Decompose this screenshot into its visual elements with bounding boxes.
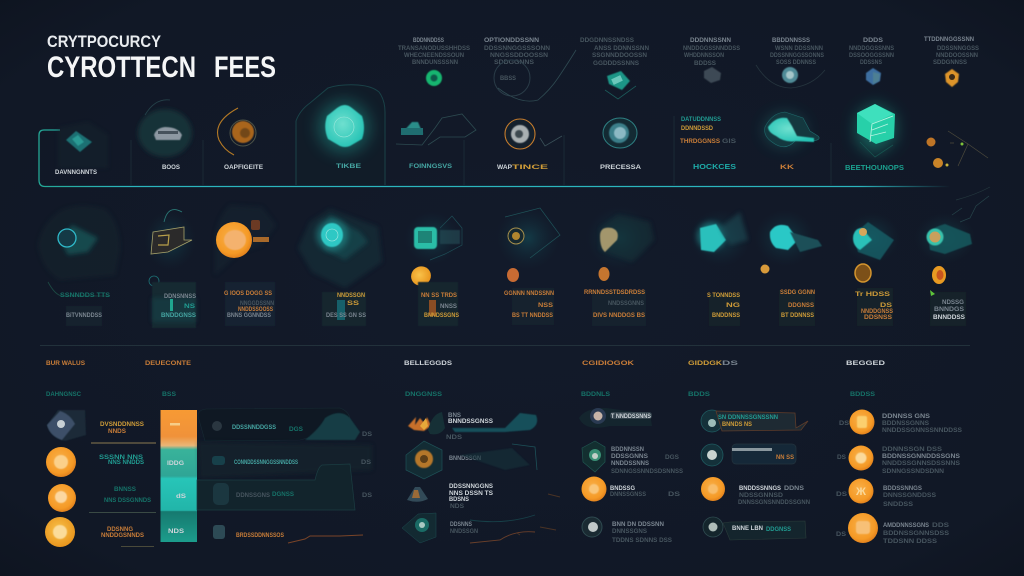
coin row 3 — [836, 478, 936, 508]
top text blocks and icons — [398, 37, 979, 101]
top item 4: NNDDGGSSNNDDSS — [683, 46, 740, 52]
bottom section headings: BDDS — [688, 392, 710, 398]
card 8: NG — [726, 303, 741, 309]
step 8: text stack: GIS — [722, 139, 736, 145]
dark badge item — [582, 517, 672, 544]
bottom section headings: DEUECONTE — [145, 361, 191, 367]
step 9: teal pouch — [765, 112, 819, 171]
panel row 3: DS — [362, 493, 372, 499]
stacked colour bar: NDS — [168, 529, 184, 535]
coin row 1: DDNNSS GNS — [882, 414, 930, 420]
grey coin row: DVSNDDNNSS — [100, 422, 144, 428]
title: FEES — [214, 51, 276, 84]
bottom section headings: BELLEGGDS — [404, 361, 452, 367]
step 10: large green cube — [845, 103, 904, 172]
panel row 1: DS — [362, 432, 372, 438]
card 2 — [144, 210, 196, 328]
orange coin row 3: BNNSS — [114, 487, 136, 493]
section divider — [40, 345, 970, 346]
coin row 3: DNNSSGNDDSS — [883, 493, 936, 499]
panel row 4: BRDSSDDNNSSOS — [236, 533, 284, 539]
top item 6: NNDDGGSSNNS — [849, 46, 894, 52]
panel row 3 — [197, 464, 372, 510]
shield item: BDDNNSSN — [611, 447, 644, 453]
panel row 3: DGNSS — [272, 492, 294, 498]
step 6: ringed coin: WAP — [497, 165, 512, 171]
coin row 4: BDDNSSGNNSDSS — [883, 531, 949, 537]
flame item: BNNDSSGNSS — [448, 419, 493, 425]
column 6: orange coins and descriptions — [836, 410, 962, 545]
card 10 — [844, 212, 900, 326]
teal outlined panel: BNNE LBN — [732, 526, 763, 532]
card 7: DIVS NNDDGS BS — [593, 313, 645, 319]
step 5: wallet and line — [396, 114, 476, 170]
step 8: text stack: HOCKCES — [693, 162, 736, 171]
top item 7 — [924, 37, 979, 87]
coin row 3: Ж — [855, 486, 866, 498]
step 8: text stack — [680, 117, 736, 171]
middle row of fee cards — [38, 196, 989, 328]
top item 7: TTDDNNGGSSNN — [924, 37, 974, 43]
orange coin row 2 — [46, 447, 144, 477]
stacked colour bar: IDDG — [167, 461, 184, 467]
dark teal item — [402, 494, 560, 543]
step 2: dark device: BOOS — [162, 165, 180, 171]
top item 1: TRANSANODUSSHHDSS — [398, 46, 470, 52]
step 8: text stack: THRDGGNSS — [680, 139, 720, 145]
stacked colour bar — [160, 410, 197, 542]
dark badge item: TDDNS SDNNS DSS — [612, 538, 672, 544]
card 7: NNDSSGNNS — [608, 301, 644, 307]
dark badge item: DNNSSGNS — [612, 529, 647, 535]
top item 5 — [756, 38, 825, 88]
panel row 4 — [213, 525, 363, 543]
gold hex item: BNNDSSGN — [449, 456, 481, 462]
top item 2: DDSSNNGGSSSONN — [484, 46, 550, 52]
circle item one: T NNDDSSNNS — [611, 414, 651, 420]
top item 2: SDDGGNNS — [494, 60, 534, 66]
pyramid item: DDSSNNGGNS — [449, 484, 493, 490]
card 6: BS TT NNDDSS — [512, 313, 553, 319]
coin row 3: BDDSSNNGS — [883, 486, 922, 492]
top item 6: DSSOOGGSSNN — [849, 53, 894, 59]
step 1: diamond — [55, 122, 108, 176]
step 3: orange coin: OAPFIGEITE — [224, 165, 263, 171]
title: CYROTTECN — [47, 51, 196, 84]
orange coin row: BNDDSSNNGS — [739, 486, 781, 492]
card 1: SSNNDDS TTS — [60, 293, 110, 299]
top item 1: BDDNNDDSS — [413, 38, 444, 44]
pyramid item: NDS — [450, 504, 464, 510]
column 4: icons and descriptions — [579, 408, 683, 544]
shield item: DDSSGNNS — [611, 454, 648, 460]
gold coin row 4: NNDDGSNNDS — [101, 533, 144, 539]
coin row 3: DS — [836, 492, 847, 498]
step 4: large teal hexagon: TIKBE — [336, 164, 361, 170]
coin row 4 — [836, 513, 949, 545]
card 2: DDNSNNSS — [164, 294, 196, 300]
dark blue panel: NN SS — [776, 455, 794, 461]
panel row 2 — [198, 442, 372, 478]
orange coin item — [582, 476, 680, 502]
card 8 — [690, 210, 750, 326]
column 3: icons and descriptions — [402, 412, 560, 543]
bottom section headings: GIDDGK — [688, 361, 723, 367]
orange coin row 3 — [48, 484, 156, 513]
card 9 — [755, 210, 822, 326]
top item 7: NNDDOOSSNN — [936, 53, 978, 59]
top item 3: SSGNNDDOOSSN — [592, 53, 647, 59]
bottom section headings: BUR WALUS — [46, 361, 85, 367]
card 2: BNDDGNSS — [161, 313, 196, 319]
column 5: icons and panels — [701, 410, 810, 540]
bottom section headings: CGIDIOGOK — [582, 361, 635, 367]
card 9: DDGNSS — [788, 303, 814, 309]
step 7: blue ring: PRECESSA — [600, 165, 642, 171]
card 1: BiTVNNDDSS — [66, 313, 102, 319]
timeline rail — [39, 130, 950, 186]
orange coin item: DNNSSGNSS — [610, 492, 646, 498]
bottom section headings: BSS — [162, 392, 176, 398]
bottom section headings: BDDNLS — [581, 392, 610, 398]
step 4: large teal hexagon — [296, 85, 385, 185]
coin row 4: AMDDNNSSGNS — [883, 523, 929, 529]
top item 3: ANSS DDNNSSNN — [594, 46, 649, 52]
orange coin row: NDSSGNNSD — [739, 493, 784, 499]
bottom section headings: DAHNGNSC — [46, 392, 82, 398]
coin row 2: NNDDSSGNNSDSSNNS — [882, 461, 960, 467]
step 7: blue ring — [600, 118, 642, 171]
card 11: BNNDGS — [934, 307, 964, 313]
top item 2: NNGSSDDOOSSN — [490, 53, 548, 59]
coin row 3: SNDDSS — [883, 502, 913, 508]
card 4 — [298, 209, 382, 326]
card 5: NN SS TRDS — [421, 293, 457, 299]
coin row 1: BDDNSSGNNS — [882, 421, 929, 427]
step 3: orange coin — [218, 108, 263, 171]
timeline panel — [39, 85, 990, 200]
top item 3: DDGDNNSSNDSS — [580, 38, 634, 44]
grey coin row — [47, 410, 156, 444]
card 10: Tr HDSS — [855, 292, 890, 298]
card 6: NSS — [538, 303, 553, 309]
panel row 3: DDNSSGNS — [236, 493, 270, 499]
coin row 1: DS — [839, 421, 849, 427]
card 3: G IOOS DOGG SS — [224, 291, 272, 297]
pyramid item: NNS DSSN TS — [449, 491, 493, 497]
coin row 1: NNDDSSGNNSSNNDDSS — [882, 428, 962, 434]
grey coin row: NNDS — [108, 429, 126, 435]
teal outlined panel: DDGNSS — [766, 527, 791, 533]
orange coin row — [701, 477, 810, 506]
card 6: GGNNN NNDSSNN — [504, 291, 554, 297]
coin row 4: TDDSNN DDSS — [883, 539, 937, 545]
panel row 2: CONNDDSSNNGGSSNNDDSS — [234, 460, 298, 466]
card 10: NNDDGNSS — [861, 309, 893, 315]
top item 1 — [398, 38, 470, 86]
dark teal item: NNDSSGN — [450, 529, 478, 535]
step 9: teal pouch: KK — [780, 165, 795, 171]
card 1 — [38, 206, 120, 326]
timeline dividers — [131, 116, 831, 185]
card 11: NDSSG — [942, 300, 964, 306]
top item 6: DDSSNS — [860, 60, 882, 66]
orange coin row 2: NNS NNDDS — [108, 460, 144, 466]
orange coin row 3: NNS DSSGNNDS — [104, 498, 151, 504]
title — [47, 32, 276, 84]
gold hex item — [406, 441, 537, 479]
panel row 2: DS — [361, 460, 371, 466]
step 10: large green cube: BEETHOUNOPS — [845, 163, 904, 172]
card 8: S TONNDSS — [707, 293, 740, 299]
shield item: SDNNGSSNNDSDSNNSS — [611, 469, 683, 475]
shield item — [582, 441, 683, 475]
card 11 — [915, 196, 989, 326]
card 10: DDSNSS — [864, 315, 892, 321]
card 3: NNDDSSOOSS — [238, 307, 273, 313]
card 8: BNDDNSS — [712, 313, 740, 319]
card 6 — [496, 206, 560, 325]
card 9: SSDG GGNN — [780, 290, 815, 296]
orange outlined panel — [701, 410, 808, 432]
flame item: BNS — [448, 413, 461, 419]
flame item: NDS — [446, 435, 462, 441]
card 5: NNSS — [440, 304, 457, 310]
column 1: coins with labels — [45, 410, 156, 547]
coin row 2 — [837, 446, 960, 475]
step 1: diamond: DAVNNGNNTS — [55, 170, 97, 176]
top item 1: BNNDUNSSSNN — [412, 60, 458, 66]
orange coin row: DDNS — [784, 486, 804, 492]
pyramid item — [407, 484, 493, 510]
bottom section headings: BDDSS — [850, 392, 875, 398]
stacked colour bar: dS — [176, 494, 186, 500]
card 4: SS — [347, 301, 359, 307]
top item 7: SDDGNNSS — [933, 60, 967, 66]
shield item: NNDDSSNNS — [611, 461, 649, 467]
orange outlined panel: SN DDNNSSGNSSNN — [718, 415, 778, 421]
panel row 1 — [198, 408, 372, 441]
bottom section headings: BEGGED — [846, 361, 886, 367]
coin row 1 — [839, 410, 962, 434]
orange coin row: DNNSSGNSNNDDSSGNN — [738, 500, 810, 506]
top item 6: DDDS — [863, 38, 883, 44]
title: CRYTPOCURCY — [47, 32, 162, 51]
flame item — [408, 412, 537, 441]
coin row 2: DS — [837, 455, 846, 461]
coin row 4: DDS — [932, 523, 949, 529]
top item 2 — [484, 38, 576, 101]
bottom section headings — [46, 361, 886, 398]
card 9: BT DDNNSS — [781, 313, 814, 319]
card 4: NNDSSGN — [337, 293, 365, 299]
card 4: DES SS GN SS — [326, 313, 366, 319]
step 6: ringed coin: TINCE — [512, 165, 548, 171]
top item 1: WHECNEENDSSOUN — [404, 53, 464, 59]
orange coin item: DS — [668, 492, 680, 498]
coin row 2: DDNNSSGN DSS — [882, 447, 942, 453]
bottom section headings: DS — [722, 361, 738, 367]
top item 2: OPTIONDDSSNN — [484, 38, 539, 44]
panel row 1: DGS — [289, 427, 303, 433]
dark badge item: BNN DN DDSSNN — [612, 522, 664, 528]
top item 5: BBDDNNSSS — [772, 38, 810, 44]
top item 5: WSNN DDSSNNN — [775, 46, 823, 52]
orange coin row 2: SSSNN NNS — [99, 455, 143, 461]
panel row 1: DDSSNNDDGSS — [232, 425, 276, 431]
top item 4: WHDDNNSSON — [684, 53, 724, 59]
gold coin row 4 — [45, 517, 154, 547]
coin row 2: SDNNGSSNDSDNN — [882, 469, 944, 475]
gold coin row 4: DDSNNG — [107, 527, 133, 533]
column 2: gradient bar and panels — [160, 408, 372, 543]
card 11: BNNDDSS — [933, 315, 965, 321]
bottom section headings: DNGGNSS — [405, 392, 442, 398]
card 7 — [584, 206, 654, 326]
top item 5: SOSS DDNNSS — [776, 60, 816, 66]
step 2: dark device — [138, 100, 192, 171]
step 8: text stack: DATUDDNNSS — [681, 117, 721, 123]
card 5: BNNDSSGNS — [424, 313, 459, 319]
top item 6 — [849, 38, 894, 85]
shield item: DGS — [665, 455, 679, 461]
top item 4 — [683, 38, 740, 83]
orange outlined panel: BNNDS NS — [722, 422, 752, 428]
card 10: DS — [880, 303, 892, 309]
top item 5: DDSSNNGGSSONNS — [770, 53, 824, 59]
dark teal item: DDSNNS — [450, 522, 472, 528]
top item 2: BBSS — [500, 76, 516, 82]
coin row 4: DS — [836, 532, 846, 538]
top item 4: DDDNNSSNN — [690, 38, 731, 44]
top item 4: BDDSS — [694, 61, 716, 67]
coin row 2: BDDNSSGNNDDSSGNS — [882, 454, 960, 460]
card 3: BNNS GGNNDSS — [227, 313, 271, 319]
top item 3 — [580, 38, 649, 99]
pyramid item: BDSNS — [449, 497, 469, 503]
step 11: coins and network lines — [926, 131, 990, 200]
card 7: RRNNDSSTDSDRDSS — [584, 290, 645, 296]
top item 3: GGDDDSSNNS — [593, 61, 639, 67]
step 6: ringed coin — [497, 119, 562, 171]
card 5 — [404, 211, 462, 326]
step 5: wallet and line: FOINNGSVS — [409, 164, 452, 170]
teal outlined panel — [703, 517, 806, 540]
top item 7: DDSSNNGGSS — [937, 46, 979, 52]
step 8: text stack: DDNNDSSD — [681, 126, 714, 132]
card 3 — [215, 205, 276, 326]
card 2: NS — [184, 304, 195, 310]
card 3: NNGGDSSNN — [240, 301, 274, 307]
orange coin item: BNDSSG — [610, 486, 635, 492]
